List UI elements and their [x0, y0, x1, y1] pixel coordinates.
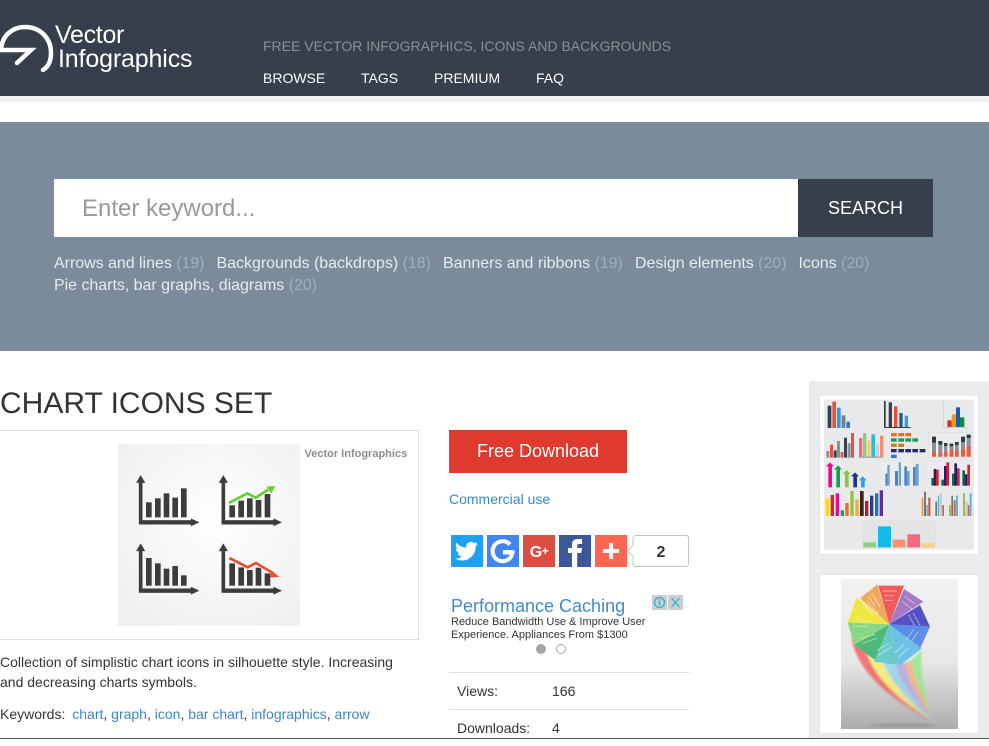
- category links: Design elements (20): [635, 254, 786, 272]
- rainbow tail: [852, 637, 936, 723]
- icon: ad info and close: [652, 595, 683, 610]
- ad carousel dots: [536, 644, 566, 654]
- page bottom edge: [0, 738, 989, 739]
- category links: Banners and ribbons (19): [443, 254, 623, 272]
- ad heading: Performance Caching: [451, 596, 625, 616]
- icon: falling bars with red arrow: [219, 544, 282, 594]
- navigation: [263, 70, 564, 86]
- icon: rising bars with green arrow: [219, 475, 282, 526]
- wheel shadow: [869, 723, 936, 727]
- thumbnail: rainbow wheel: [820, 574, 978, 734]
- logo text: Vector: [55, 21, 124, 49]
- row two charts: [826, 432, 972, 458]
- stats table: [449, 672, 689, 736]
- ad body: Reduce Bandwidth Use & Improve User: [451, 616, 645, 628]
- logo text: [55, 21, 192, 73]
- keywords: Keywords: chart, graph, icon, bar chart, infographics, arrow: [0, 706, 370, 722]
- header bar: [0, 0, 989, 96]
- category links: Arrows and lines (19): [54, 254, 205, 272]
- search input: [54, 179, 798, 237]
- icon: rising bars: [136, 475, 199, 526]
- share count bubble: [627, 535, 689, 567]
- tagline: FREE VECTOR INFOGRAPHICS, ICONS AND BACKGROUNDS: [263, 38, 671, 54]
- watermark: Vector Infographics: [304, 448, 407, 460]
- downloads row: Downloads:: [457, 720, 530, 736]
- main preview frame: [0, 430, 419, 640]
- download button: Free Download: [477, 441, 599, 461]
- logo: [0, 21, 192, 73]
- preview chart icons image: [118, 444, 300, 626]
- thumbnail: bar chart collection: [820, 395, 978, 554]
- icon: google plus: G+: [530, 544, 548, 561]
- search input: Enter keyword...: [82, 195, 255, 222]
- icon: add this plus: [595, 535, 627, 567]
- commercial use link: Commercial use: [449, 491, 550, 507]
- navigation: BROWSE: [263, 70, 325, 86]
- search button: [798, 179, 933, 237]
- ad body: [451, 616, 646, 641]
- share count bubble: 2: [657, 544, 666, 561]
- icon: facebook: [559, 535, 591, 567]
- downloads row: [449, 709, 689, 739]
- icon: google plus: [523, 535, 555, 567]
- description: [0, 654, 393, 690]
- row five chart: [863, 520, 935, 548]
- category links: Pie charts, bar graphs, diagrams (20): [54, 276, 317, 294]
- views row: 166: [552, 683, 575, 699]
- social share buttons: [451, 535, 689, 567]
- search panel: [0, 122, 989, 351]
- color wheel: [848, 584, 930, 666]
- ad body: Experience. Appliances From $1300: [451, 629, 628, 641]
- downloads row: 4: [552, 720, 560, 736]
- wheel captions: [853, 591, 920, 658]
- icon: falling bars: [136, 544, 199, 594]
- description: and decreasing charts symbols.: [0, 674, 197, 690]
- navigation: TAGS: [361, 70, 398, 86]
- views row: [449, 672, 689, 709]
- advertisement: [451, 595, 683, 654]
- category links: Backgrounds (backdrops) (18): [216, 254, 431, 272]
- page title: CHART ICONS SET: [0, 387, 272, 420]
- navigation: PREMIUM: [434, 70, 500, 86]
- row four charts: [826, 490, 972, 516]
- views row: Views:: [457, 683, 498, 699]
- icon: twitter: [451, 535, 483, 567]
- logo icon: [0, 24, 54, 72]
- row three charts: [826, 462, 971, 487]
- navigation: FAQ: [536, 70, 564, 86]
- logo text: Infographics: [58, 45, 192, 73]
- search button: SEARCH: [828, 198, 903, 218]
- row one charts: [828, 401, 968, 428]
- category links: Icons (20): [798, 254, 869, 272]
- category links: [54, 254, 869, 294]
- description: Collection of simplistic chart icons in silhouette style. Increasing: [0, 654, 393, 670]
- header strip: [0, 96, 989, 102]
- icon: google: [487, 535, 519, 567]
- download button: [449, 430, 627, 473]
- sidebar: [809, 381, 989, 739]
